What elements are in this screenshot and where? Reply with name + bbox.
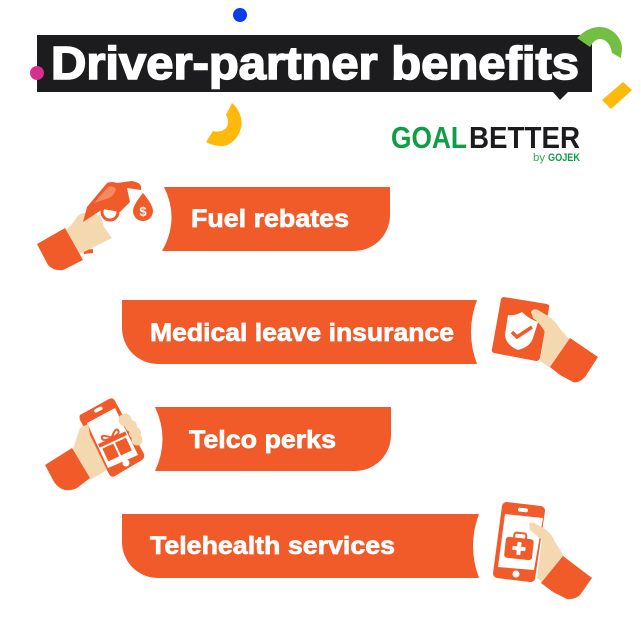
screen [87, 408, 138, 468]
icon: hand with shield card [492, 297, 598, 382]
check [512, 327, 532, 337]
icon: hand with phone and gift [45, 398, 144, 490]
home button [122, 460, 130, 466]
decoration: blue dot [233, 8, 247, 22]
trigger ring [102, 204, 118, 220]
icon: hand with phone and medical kit [493, 502, 592, 599]
label: Telco perks [189, 426, 336, 454]
label: Medical leave insurance [150, 319, 454, 347]
card [492, 297, 549, 361]
logo: GoalBetter by Gojek [391, 120, 580, 164]
screen [498, 514, 543, 570]
nozzle [83, 181, 141, 222]
medical kit [504, 532, 534, 560]
home button [512, 570, 520, 578]
logo: GoalBetter by Gojek: by [533, 152, 546, 164]
speaker [518, 507, 528, 513]
icon: hand with fuel nozzle: $ [139, 204, 147, 219]
panel: medical leave insurance [122, 300, 477, 364]
panel: telco perks [155, 407, 391, 471]
shield [505, 312, 538, 350]
panel: telehealth services [122, 514, 479, 578]
label: Fuel rebates [191, 205, 349, 233]
decoration: yellow arc [206, 103, 242, 146]
hand [64, 213, 112, 256]
icon: hand with fuel nozzle [37, 181, 153, 270]
title: Driver-partner benefits [51, 37, 579, 89]
logo: GoalBetter by Gojek: GOAL [391, 120, 467, 155]
fingers [118, 414, 142, 446]
decoration: magenta dot [30, 66, 44, 80]
cuff [550, 338, 598, 382]
phone [80, 398, 144, 477]
title banner [37, 35, 592, 100]
fuel drop [133, 193, 153, 221]
label: Telehealth services [150, 532, 395, 560]
logo: GoalBetter by Gojek: GOJEK [548, 152, 580, 164]
hand [529, 522, 564, 586]
logo: GoalBetter by Gojek: BETTER [469, 120, 580, 155]
cuff [541, 556, 592, 599]
decoration: green arc [577, 27, 622, 58]
panel: fuel rebates [162, 187, 390, 251]
decoration: yellow bar [602, 82, 632, 109]
cuff [37, 228, 83, 270]
phone [493, 502, 545, 582]
hand [531, 309, 570, 370]
hand palm [72, 424, 107, 480]
gift [96, 427, 134, 462]
speaker [94, 406, 103, 413]
cuff [45, 448, 90, 490]
